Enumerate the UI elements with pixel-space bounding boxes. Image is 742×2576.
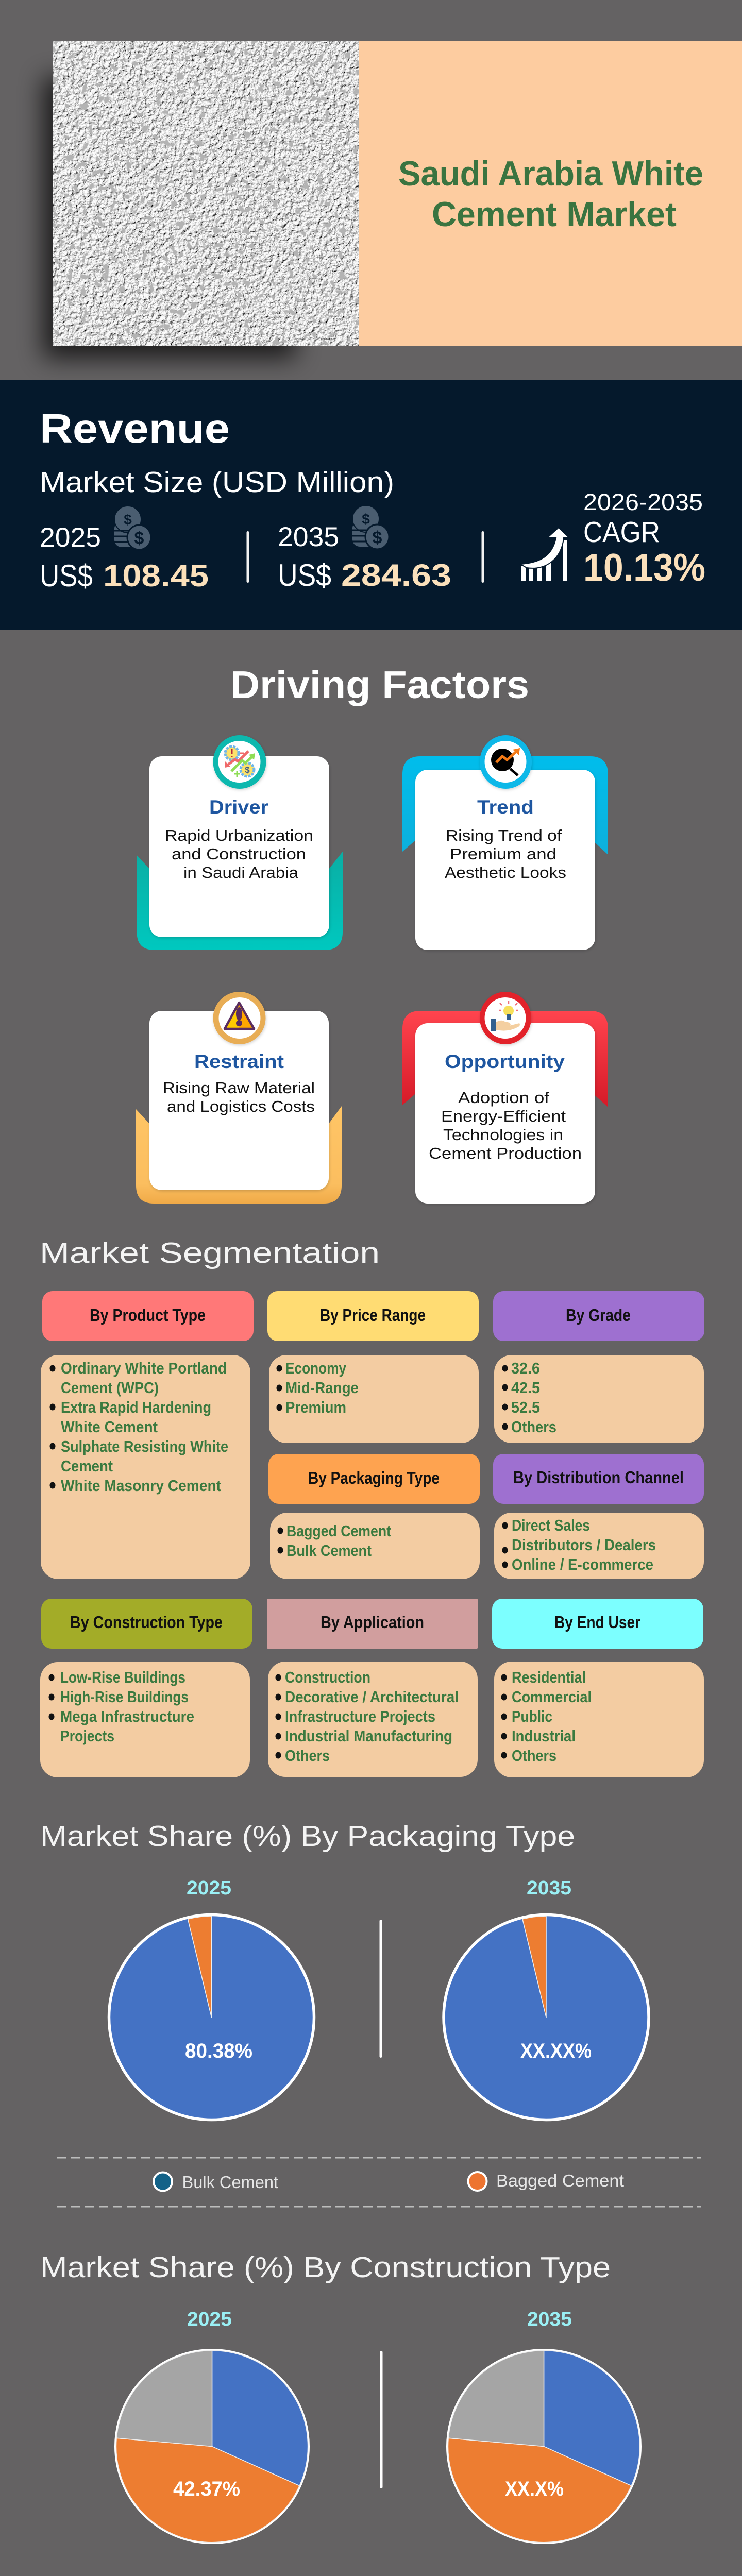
opportunity text: Adoption of — [458, 1089, 549, 1107]
icon: driver — [213, 735, 266, 789]
end user list: Residential — [512, 1668, 586, 1686]
end user list: Commercial — [512, 1688, 592, 1706]
opportunity text — [429, 1089, 582, 1162]
end user list: Others — [512, 1747, 556, 1765]
packaging list: Bagged Cement — [286, 1522, 391, 1540]
trend text: Premium and — [450, 845, 556, 863]
construction list: High-Rise Buildings — [60, 1688, 189, 1706]
grade list: 32.6 — [511, 1359, 540, 1377]
hero image shadow — [43, 77, 296, 358]
icon: growth arrow — [520, 528, 569, 581]
distribution list: Online / E-commerce — [512, 1555, 653, 1573]
panel: by packaging type — [268, 1454, 480, 1579]
product type list: Ordinary White Portland — [61, 1359, 227, 1377]
distribution list: Direct Sales — [512, 1516, 590, 1534]
application list: Decorative / Architectural — [285, 1688, 459, 1706]
panel: by product type — [41, 1291, 254, 1579]
packaging list: Bulk Cement — [286, 1541, 372, 1560]
panel: by grade: By Grade — [566, 1306, 631, 1325]
icon: coins 2025: $ — [124, 512, 132, 528]
price range list: Economy — [285, 1359, 347, 1377]
title: Cement Market — [432, 195, 677, 234]
driver title: Driver — [209, 796, 268, 818]
value 2025: US$ — [40, 558, 93, 593]
chart: packaging pie 2025: 2025 — [187, 1877, 231, 1899]
chart: construction pie 2025 — [115, 2309, 308, 2543]
chart: packaging pie 2035: 2035 — [527, 1877, 571, 1899]
price range list: Premium — [285, 1398, 346, 1416]
panel: by price range — [267, 1291, 479, 1443]
value 2025: 108.45 — [103, 558, 209, 593]
grade list: 42.5 — [511, 1379, 540, 1397]
driver text: Rapid Urbanization — [165, 826, 313, 844]
panel: by packaging type: By Packaging Type — [308, 1468, 440, 1487]
opportunity title: Opportunity — [445, 1051, 565, 1072]
icon: restraint — [213, 992, 266, 1044]
panel: by application: By Application — [321, 1613, 424, 1632]
icon: coins 2035 — [352, 505, 389, 549]
trend text: Rising Trend of — [446, 826, 562, 844]
product type list: Extra Rapid Hardening — [61, 1398, 211, 1416]
panel: by distribution channel: By Distribution Channel — [513, 1468, 684, 1487]
icon: coins 2035: $ — [362, 511, 370, 527]
chart: construction pie 2035: 2035 — [527, 2309, 572, 2330]
construction list: Projects — [60, 1727, 114, 1745]
end user list: Industrial — [512, 1727, 576, 1745]
restraint text: and Logistics Costs — [167, 1097, 315, 1115]
2035 year: 2035 — [278, 522, 339, 552]
CAGR block: 2026-2035 — [583, 489, 703, 515]
chart: packaging pie 2025: 80.38% — [185, 2040, 252, 2062]
panel: by grade — [493, 1291, 704, 1443]
CAGR block: CAGR — [583, 516, 660, 549]
chart: construction pie 2025: 2025 — [187, 2309, 232, 2330]
icon: opportunity — [480, 992, 531, 1044]
product type list — [49, 1359, 228, 1495]
application list: Infrastructure Projects — [285, 1707, 435, 1725]
icon: coins 2025: $ — [134, 529, 144, 548]
restraint title: Restraint — [194, 1051, 284, 1072]
panel: by distribution channel — [493, 1454, 704, 1579]
panel: restraint — [136, 992, 342, 1204]
revenue heading: Revenue — [40, 405, 230, 451]
panel: by application — [267, 1599, 478, 1777]
legend: packaging type — [154, 2171, 624, 2192]
panel: by product type: By Product Type — [90, 1306, 206, 1325]
product type list: White Cement — [61, 1418, 158, 1436]
icon: coins 2035: $ — [373, 528, 382, 548]
panel: by construction type — [40, 1599, 252, 1777]
chart: packaging pie 2035 — [444, 1877, 649, 2120]
title — [398, 154, 703, 234]
restraint text: Rising Raw Material — [163, 1079, 315, 1097]
grade list: Others — [511, 1418, 556, 1436]
panel: by end user — [492, 1599, 704, 1777]
trend text — [445, 826, 566, 882]
product type list: Sulphate Resisting White — [61, 1437, 228, 1455]
construction list: Low-Rise Buildings — [60, 1668, 185, 1686]
CAGR block — [583, 489, 705, 589]
chart: packaging pie 2025 — [109, 1877, 314, 2120]
product type list: Cement (WPC) — [61, 1379, 159, 1397]
chart: construction pie 2025: 42.37% — [173, 2478, 240, 2500]
price range list: Mid-Range — [285, 1379, 359, 1397]
value 2025 — [40, 558, 209, 593]
heading: driving factors: Driving Factors — [230, 663, 529, 706]
panel: driver — [137, 735, 343, 950]
CAGR block: 10.13% — [583, 546, 705, 589]
2025 year: 2025 — [40, 522, 101, 553]
application list: Construction — [285, 1668, 370, 1686]
packaging list — [277, 1522, 391, 1560]
heading: market segmentation: Market Segmentation — [40, 1236, 380, 1269]
panel: by end user: By End User — [554, 1613, 640, 1632]
page background — [0, 0, 742, 1793]
driver text — [165, 826, 313, 882]
trend text: Aesthetic Looks — [445, 863, 566, 882]
opportunity text: Cement Production — [429, 1144, 582, 1162]
value 2035: 284.63 — [341, 558, 451, 592]
heading: market share by packaging type: Market Share (%) By Packaging Type — [40, 1820, 575, 1853]
lower page background — [0, 1793, 742, 2576]
icon: coins 2025 — [114, 506, 151, 550]
chart: packaging pie 2035: XX.XX% — [520, 2040, 592, 2062]
product type list: Cement — [61, 1457, 113, 1475]
grade list: 52.5 — [511, 1398, 540, 1416]
heading: market share by construction type: Market Share (%) By Construction Type — [40, 2251, 611, 2284]
icon: trend — [480, 735, 532, 789]
panel: revenue — [0, 380, 742, 630]
value 2035 — [278, 558, 451, 592]
distribution list — [502, 1516, 656, 1573]
icon: driver: $ — [245, 765, 250, 775]
hero banner — [43, 41, 742, 358]
price range list — [276, 1359, 359, 1416]
legend: packaging type: Bagged Cement — [496, 2171, 624, 2190]
opportunity text: Energy-Efficient — [441, 1107, 566, 1125]
panel: opportunity — [402, 992, 608, 1204]
product type list: White Masonry Cement — [61, 1477, 221, 1495]
panel: trend — [402, 735, 608, 950]
application list — [275, 1668, 459, 1765]
panel: by price range: By Price Range — [320, 1306, 426, 1325]
opportunity text: Technologies in — [443, 1126, 563, 1144]
chart: construction pie 2035: XX.X% — [505, 2478, 564, 2500]
title: Saudi Arabia White — [398, 154, 703, 193]
driver text: in Saudi Arabia — [183, 863, 299, 882]
distribution list: Distributors / Dealers — [512, 1536, 656, 1554]
end user list: Public — [512, 1707, 552, 1725]
end user list — [501, 1668, 592, 1765]
panel: by construction type: By Construction Type — [70, 1613, 223, 1632]
title panel — [359, 41, 742, 346]
legend: packaging type: Bulk Cement — [182, 2173, 278, 2192]
construction list: Mega Infrastructure — [60, 1707, 194, 1725]
application list: Industrial Manufacturing — [285, 1727, 452, 1745]
trend title: Trend — [477, 796, 534, 818]
chart: construction pie 2035 — [447, 2309, 640, 2543]
driver text: and Construction — [172, 845, 306, 863]
cement texture photo — [53, 41, 359, 346]
value 2035: US$ — [278, 558, 331, 592]
application list: Others — [285, 1747, 330, 1765]
restraint text — [163, 1079, 315, 1115]
construction list — [48, 1668, 194, 1745]
grade list — [502, 1359, 556, 1436]
market size label: Market Size (USD Million) — [40, 466, 394, 499]
